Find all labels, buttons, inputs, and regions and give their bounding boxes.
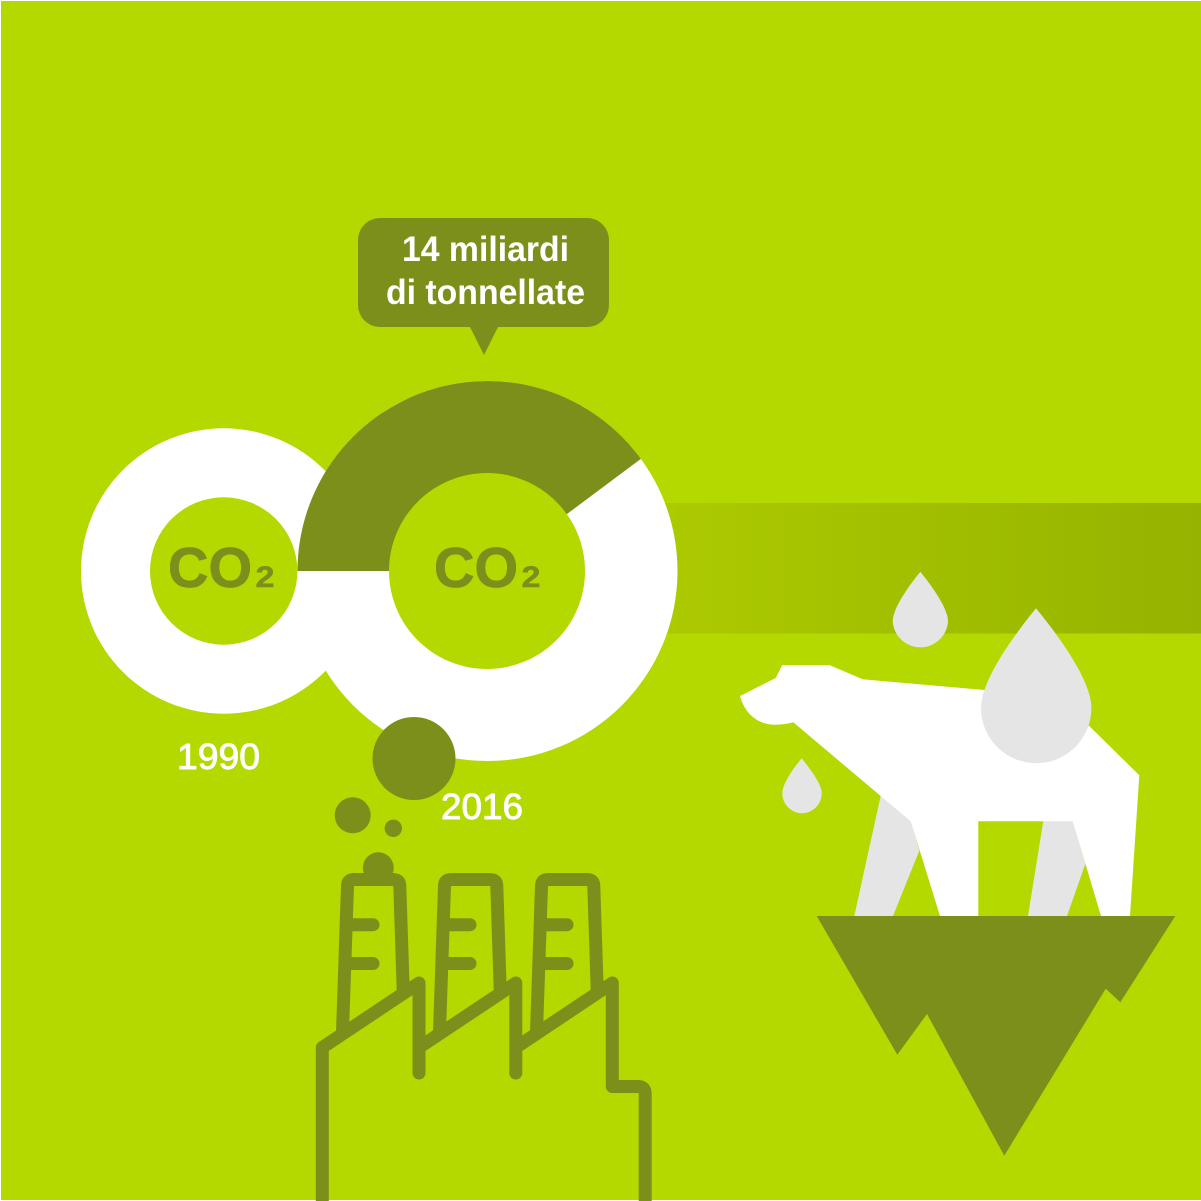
callout: 14 miliardi di tonnellate <box>358 218 609 355</box>
callout: 14 miliardi di tonnellate: di tonnellate <box>386 273 585 312</box>
donut chart: 1990 <box>81 428 366 714</box>
year label: 1990: 1990 <box>177 736 260 777</box>
donut chart: 2016 <box>298 381 678 761</box>
inner circle and CO2 label 1990: 2 <box>256 561 274 594</box>
increase sector: 14 miliardi di tonnellate <box>298 381 641 571</box>
year label: 2016: 2016 <box>441 786 523 827</box>
melting iceberg <box>817 916 1175 1156</box>
drop: small <box>782 758 822 813</box>
drop: large <box>981 608 1091 763</box>
chimney 3 <box>536 880 597 1032</box>
back legs <box>854 796 919 916</box>
bear body <box>740 665 1139 916</box>
inner circle and CO2 label 1990: CO <box>168 536 252 600</box>
icon: factory <box>322 880 645 1201</box>
icon: polar bear <box>740 665 1139 916</box>
gradient band <box>600 503 1201 634</box>
drop: medium <box>893 572 948 647</box>
callout: 14 miliardi di tonnellate: 14 miliardi <box>402 230 569 269</box>
chimney 2 <box>440 880 500 1032</box>
inner circle 2016 <box>389 473 585 669</box>
factory outline <box>322 983 645 1201</box>
subscript: 2 2016: 2 <box>522 561 540 594</box>
chimney 1 <box>342 880 403 1032</box>
label: CO2 2016: CO <box>434 536 518 600</box>
smoke bubbles <box>335 717 456 883</box>
inner circle and CO2 label 1990 <box>150 497 297 645</box>
